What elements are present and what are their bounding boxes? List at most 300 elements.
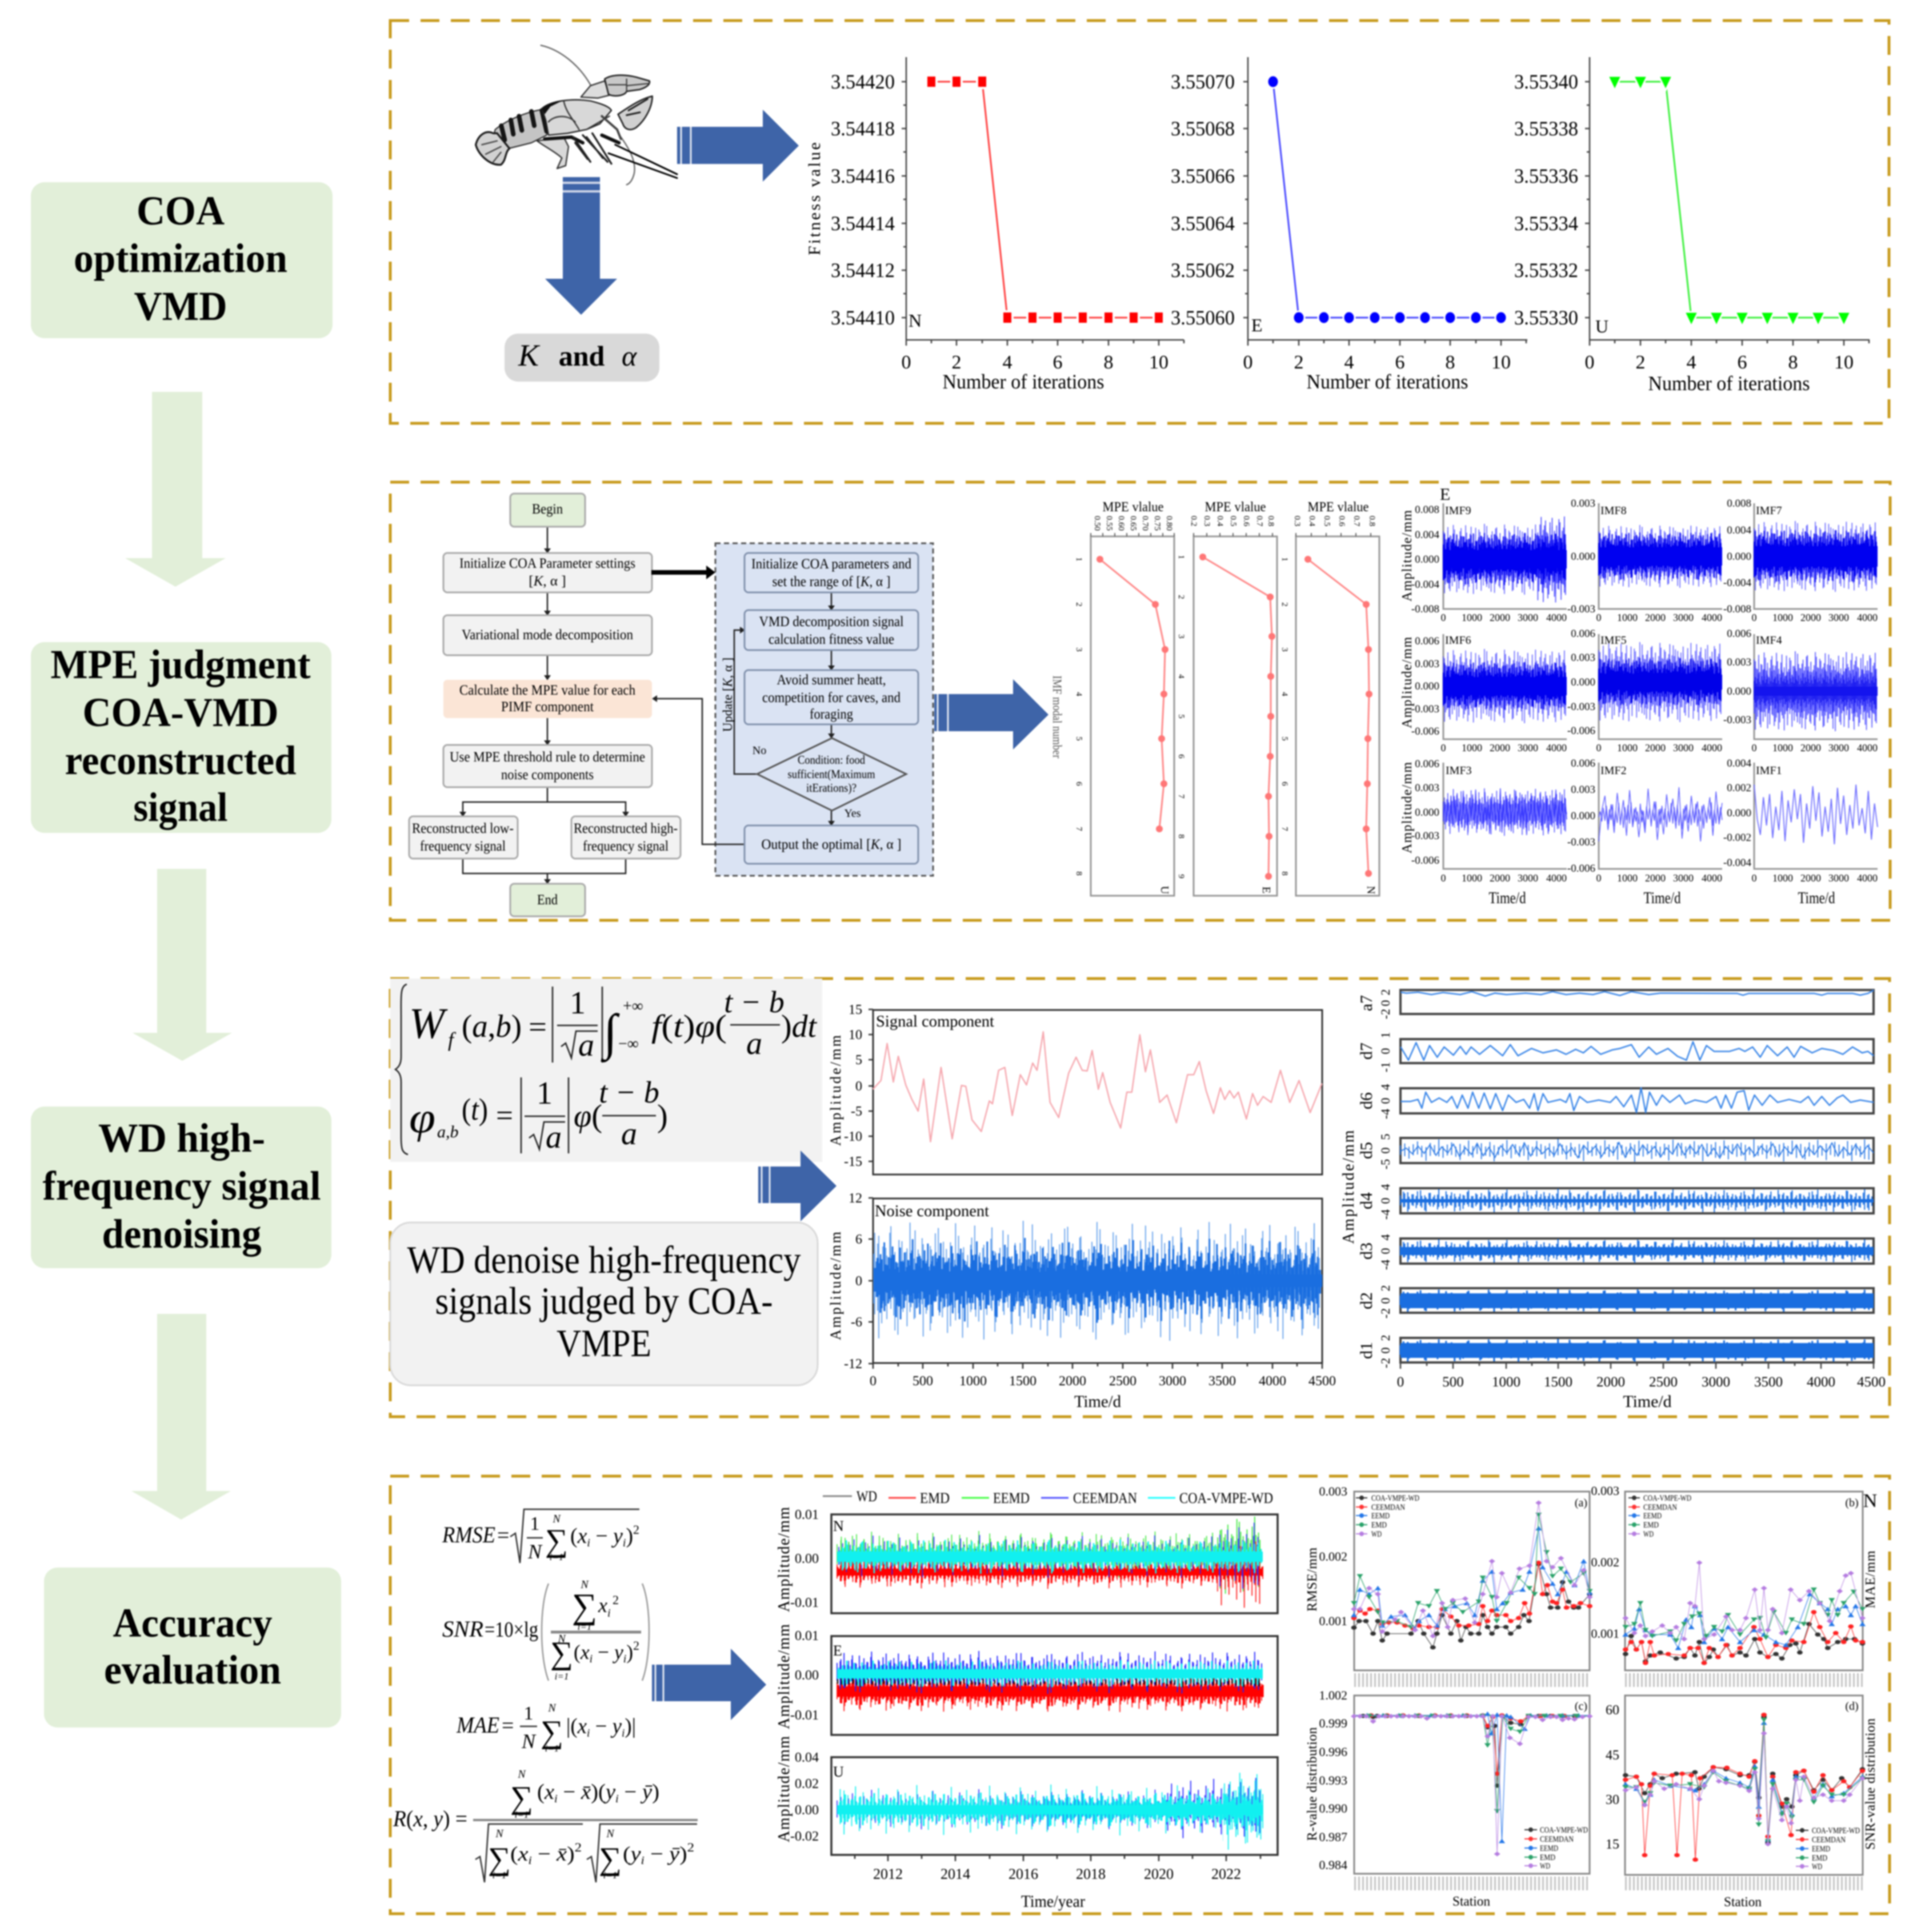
chart: noise component: 3000 xyxy=(1159,1374,1186,1389)
chart: N fitness curve: 2 xyxy=(952,352,961,373)
formula: R(x,y): − xyxy=(532,1842,557,1865)
strip y ticks: 2 xyxy=(1378,1285,1392,1291)
formula: R(x,y) xyxy=(393,1768,698,1882)
chart: MPE value N: 1 xyxy=(1280,557,1289,562)
strip y ticks: -4 xyxy=(1378,1260,1392,1270)
flow box: Initialize COA: Initialize COA Parameter settings xyxy=(459,556,635,571)
chart: (d) SNR-value: 60 xyxy=(1606,1703,1619,1718)
formula: R(x,y): − xyxy=(645,1842,669,1865)
tick labels: IMF x axes: 0 xyxy=(1596,742,1601,753)
legend (b): EEMD xyxy=(1643,1512,1662,1521)
axis titles: Time/d xyxy=(1489,889,1835,907)
tick labels: IMF x axes: 3000 xyxy=(1673,612,1694,623)
chart: N fitness curve: 0 xyxy=(902,352,911,373)
tick labels: IMF y axes: 0.008 xyxy=(1415,504,1439,516)
formula block: wavelet transform: t − b xyxy=(724,985,785,1019)
flow box: Begin: Begin xyxy=(532,502,563,517)
chart: U fitness curve: 3.55338 xyxy=(1514,117,1578,140)
chart grid: IMF components xyxy=(1400,485,1878,907)
strip labels: d4 xyxy=(1357,1192,1376,1209)
formula block: wavelet transform: a xyxy=(746,1026,762,1061)
chart: E fitness curve: 3.55068 xyxy=(1171,117,1235,140)
formula: SNR: i xyxy=(590,1653,593,1665)
chart: N fitness curve: 3.54414 xyxy=(831,212,895,235)
tick labels: IMF y axes: 0.000 xyxy=(1415,554,1439,566)
chart: N residual series: 0.01 xyxy=(795,1508,819,1522)
formula block: wavelet transform: W xyxy=(409,1000,449,1048)
label: E: E xyxy=(1440,485,1450,504)
chart: E fitness curve: 10 xyxy=(1491,352,1511,373)
formula: SNR: SNR xyxy=(442,1616,483,1642)
chart: MPE value U: MPE vlalue xyxy=(1103,500,1163,515)
tick labels: IMF y axes: 0.003 xyxy=(1727,656,1751,668)
chart: U fitness curve: 3.55334 xyxy=(1514,212,1578,235)
chart: (a) RMSE: 0.002 xyxy=(1319,1549,1347,1564)
formula: SNR: − xyxy=(593,1641,614,1664)
chart: (b) MAE: (b) xyxy=(1845,1497,1859,1509)
chart: signal component: 5 xyxy=(855,1053,862,1068)
chart: wavelet decomposition strips: 4500 xyxy=(1857,1374,1886,1390)
formula block: wavelet transform: )dt xyxy=(781,1009,817,1044)
chart: N fitness curve: 3.54418 xyxy=(831,117,895,140)
formula: R(x,y): R(x, y) = xyxy=(393,1806,467,1831)
formula: SNR: x xyxy=(598,1594,607,1617)
strip y ticks: 0 xyxy=(1378,1098,1392,1104)
flow box: Initialize COA parameters: Initialize COA parameters and xyxy=(751,556,911,572)
flow box: Output the optimal xyxy=(745,825,918,864)
chart: (b) MAE: MAE/mm xyxy=(1863,1550,1878,1609)
tick labels: IMF x axes xyxy=(1441,612,1878,884)
formula block: wavelet transform: = xyxy=(529,1011,547,1044)
legend (d) xyxy=(1796,1826,1860,1871)
tick labels: IMF x axes: 0 xyxy=(1752,872,1756,884)
formula: RMSE: N xyxy=(527,1540,543,1563)
arrow: initialize to COA loop xyxy=(651,566,715,579)
legend (d): EMD xyxy=(1812,1854,1827,1863)
chart: E fitness curve: 3.55062 xyxy=(1171,259,1235,282)
formula: R(x,y): ∑ xyxy=(488,1841,511,1877)
chart: E residual series: 0.01 xyxy=(795,1629,819,1644)
tick labels: IMF x axes: 4000 xyxy=(1546,872,1567,884)
text box: WD denoise description: VMPE xyxy=(557,1321,651,1365)
axis titles: Amplitude/mm: Amplitude/mm xyxy=(1400,637,1415,728)
chart: (c) R-value: 0.999 xyxy=(1319,1716,1347,1730)
tick labels: IMF y axes: -0.006 xyxy=(1411,855,1439,867)
formula: RMSE: = xyxy=(497,1524,509,1548)
chart: N fitness curve: 4 xyxy=(1002,352,1012,373)
chart: N residual series: -0.01 xyxy=(790,1596,819,1610)
formula: R(x,y): ∑ xyxy=(510,1780,533,1815)
axis titles: Amplitude/mm xyxy=(1400,510,1415,853)
tick labels: IMF x axes: 4000 xyxy=(1702,872,1722,884)
tick labels: IMF y axes xyxy=(1411,498,1752,875)
step box: COA optimization VMD: optimization xyxy=(74,235,287,281)
flow box: Calculate MPE xyxy=(443,680,652,718)
chart: E fitness curve: 8 xyxy=(1446,352,1455,373)
chart: (b) MAE: 0.002 xyxy=(1591,1555,1619,1569)
strip y ticks: -2 xyxy=(1378,1009,1392,1019)
text box: WD denoise description: signals judged by COA- xyxy=(435,1279,773,1322)
formula block: wavelet transform xyxy=(390,979,822,1162)
flow box: Reconstructed high-frequency signal: frequency signal xyxy=(583,839,669,854)
chart: MPE value U: 0.65 xyxy=(1128,516,1138,531)
chart: N fitness curve: 3.54410 xyxy=(831,306,895,329)
chart: (c) R-value: R-value distribution xyxy=(1305,1727,1320,1841)
chart: signal component xyxy=(827,1003,1322,1175)
chart: (d) SNR-value: 15 xyxy=(1606,1837,1619,1852)
tick labels: IMF y axes: 0.008 xyxy=(1727,498,1751,510)
chart: U residual series: 2012 xyxy=(873,1866,903,1882)
chart: noise component xyxy=(827,1191,1336,1411)
formula: SNR: N xyxy=(580,1578,589,1591)
chart: IMF4 xyxy=(1754,634,1878,731)
chart: (c) R-value: (c) xyxy=(1575,1700,1587,1713)
tick labels: IMF y axes: -0.006 xyxy=(1567,725,1595,737)
tick labels: IMF y axes: 0.006 xyxy=(1571,628,1595,640)
chart: signal component: -15 xyxy=(844,1155,862,1169)
strip labels: d2 xyxy=(1357,1292,1376,1309)
tick labels: IMF x axes: 4000 xyxy=(1702,612,1722,623)
tick labels: IMF x axes: 0 xyxy=(1752,742,1756,753)
chart: MPE value U: 3 xyxy=(1074,647,1083,652)
panel: accuracy evaluation xyxy=(390,1476,1890,1914)
formula: R(x,y): i=1 xyxy=(493,1870,506,1881)
tick labels: IMF y axes: -0.006 xyxy=(1567,863,1595,875)
flow box: VMD decomposition: calculation fitness value xyxy=(769,632,894,647)
chart: (d) SNR-value: 45 xyxy=(1606,1748,1619,1763)
tick labels: IMF y axes: -0.004 xyxy=(1723,857,1751,869)
axis title: IMF modal number: IMF modal number xyxy=(1050,675,1064,759)
tick labels: IMF x axes: 4000 xyxy=(1702,742,1722,753)
chart: U residual series: 0.02 xyxy=(795,1777,819,1791)
tick labels: IMF x axes: 1000 xyxy=(1462,612,1482,623)
chart: U residual series: 2014 xyxy=(941,1866,970,1882)
flow box: Begin xyxy=(510,494,585,527)
chart: MPE value E: 3 xyxy=(1176,634,1186,639)
legend (c): WD xyxy=(1540,1862,1550,1871)
step box: MPE judgment COA-VMD reconstructed signal: signal xyxy=(134,784,227,830)
chart: U fitness curve: 6 xyxy=(1737,352,1747,373)
tick labels: IMF y axes: 0.006 xyxy=(1571,757,1595,769)
tick labels: IMF x axes: 4000 xyxy=(1546,742,1567,753)
tick labels: IMF x axes: 3000 xyxy=(1828,742,1849,753)
strip y ticks: -5 xyxy=(1378,1159,1392,1169)
formula: SNR: ∑ xyxy=(572,1587,597,1626)
flow box: Reconstructed high-frequency signal xyxy=(571,816,681,859)
chart: E residual series xyxy=(775,1624,1278,1735)
formula: RMSE: 2 xyxy=(633,1522,639,1537)
chart: noise component: 500 xyxy=(913,1374,933,1389)
step box: MPE judgment COA-VMD reconstructed signal xyxy=(31,642,331,833)
legend: methods: EEMD xyxy=(993,1490,1030,1506)
legend (a): CEEMDAN xyxy=(1371,1503,1405,1512)
flow box: Avoid summer heat: competition for caves, and xyxy=(762,690,901,706)
legend: methods xyxy=(823,1488,1273,1506)
tick labels: IMF x axes: 0 xyxy=(1752,612,1756,623)
chart: MPE value N: 0.5 xyxy=(1322,516,1331,526)
arrow: formulas to residual charts xyxy=(652,1649,766,1720)
strip y ticks: 2 xyxy=(1378,1334,1392,1341)
formula: R(x,y): N xyxy=(517,1768,526,1781)
chart: E residual series: E xyxy=(833,1642,842,1659)
chart: MPE value E: 0.3 xyxy=(1202,516,1211,526)
chart: wavelet decomposition strips: 0 xyxy=(1397,1374,1404,1390)
chart: noise component: 4000 xyxy=(1259,1374,1286,1389)
chart: E fitness curve xyxy=(1171,57,1527,393)
formula block: wavelet transform: f(t)φ( xyxy=(651,1009,727,1044)
tick labels: IMF x axes: 2000 xyxy=(1645,872,1666,884)
chart: (a) RMSE: RMSE/mm xyxy=(1305,1548,1320,1612)
chart: (c) R-value: 0.993 xyxy=(1319,1773,1347,1787)
tick labels: IMF y axes: 0.003 xyxy=(1571,652,1595,664)
chart: U fitness curve xyxy=(1514,57,1870,395)
chart: MPE value E: 4 xyxy=(1176,674,1186,679)
formula block: wavelet transform: 1 xyxy=(570,985,586,1021)
flow box: Output the optimal: Output the optimal [K, α ] xyxy=(761,837,902,852)
axis title: Fitness value: Fitness value xyxy=(805,142,824,255)
text box: WD denoise description xyxy=(390,1222,818,1385)
formula block: wavelet transform: +∞ xyxy=(623,997,643,1015)
legend: methods: CEEMDAN xyxy=(1073,1490,1137,1506)
formula block: wavelet transform: (a,b) xyxy=(462,1009,522,1044)
strip y ticks: 1 xyxy=(1378,1032,1392,1039)
arrow: crayfish to convergence curves xyxy=(677,110,799,182)
formula: R(x,y): (y xyxy=(623,1842,640,1865)
chart: (d) SNR-value: Station xyxy=(1724,1895,1762,1910)
strip labels: d6 xyxy=(1357,1092,1376,1109)
chart: IMF1 xyxy=(1754,764,1878,844)
legend (c): COA-VMPE-WD xyxy=(1540,1826,1588,1835)
formula: R(x,y): (x xyxy=(537,1780,554,1804)
chart: noise component: 2500 xyxy=(1109,1374,1136,1389)
tick labels: IMF x axes: 0 xyxy=(1596,872,1601,884)
tick labels: IMF x axes: 3000 xyxy=(1828,612,1849,623)
tick labels: IMF x axes: 1000 xyxy=(1772,872,1793,884)
tick labels: IMF y axes: 0.000 xyxy=(1415,807,1439,819)
chart: IMF3: IMF3 xyxy=(1446,764,1472,777)
formula block: wavelet transform: (t) xyxy=(462,1092,488,1127)
tick labels: IMF y axes: 0.004 xyxy=(1415,529,1440,541)
chart: IMF6: IMF6 xyxy=(1445,634,1471,647)
arrow: to signal charts xyxy=(758,1151,837,1221)
chart: MPE value N: 8 xyxy=(1280,871,1289,876)
chart: MPE value N xyxy=(1280,500,1379,896)
chart: IMF3 xyxy=(1443,764,1567,836)
chart: (d) SNR-value: 30 xyxy=(1606,1793,1619,1807)
strip y ticks: -4 xyxy=(1378,1109,1392,1119)
flowchart: COA optimization loop xyxy=(651,543,933,876)
chart: MPE value U: 7 xyxy=(1074,827,1083,831)
tick labels: IMF x axes: 1000 xyxy=(1772,742,1793,753)
chart: U residual series xyxy=(775,1736,1278,1911)
strip labels: d5 xyxy=(1357,1142,1376,1159)
chart: (a) RMSE: (a) xyxy=(1575,1497,1587,1509)
chart: MPE value N: 0.8 xyxy=(1367,516,1376,526)
tick labels: IMF x axes: 1000 xyxy=(1617,612,1638,623)
tick labels: IMF y axes: -0.002 xyxy=(1723,832,1751,844)
strip d2 xyxy=(1400,1289,1874,1312)
strip y ticks xyxy=(1378,989,1392,1368)
step box: COA optimization VMD: VMD xyxy=(134,283,227,329)
flow box: VMD decomposition xyxy=(745,610,918,650)
tick labels: IMF x axes: 0 xyxy=(1441,872,1446,884)
formula: R(x,y): − xyxy=(558,1780,581,1804)
chart: signal component: 15 xyxy=(849,1003,862,1017)
flow box: Variational mode decomposition xyxy=(443,615,652,655)
chart: E fitness curve: 3.55070 xyxy=(1171,70,1235,93)
tick labels: IMF y axes: -0.003 xyxy=(1567,836,1595,848)
chart: MPE value N: 0.4 xyxy=(1307,516,1316,527)
formula: MAE: N xyxy=(521,1730,537,1753)
chart: signal component: Amplitude/mm xyxy=(827,1035,844,1146)
flow diamond: condition: itErations)? xyxy=(806,781,857,795)
formula: SNR: i xyxy=(623,1653,626,1665)
tick labels: IMF y axes: -0.003 xyxy=(1567,701,1595,713)
formula: MAE: y xyxy=(610,1714,622,1738)
formula: MAE: i xyxy=(587,1727,590,1739)
chart: N fitness curve: 10 xyxy=(1149,352,1168,373)
axis titles: Time/d: Time/d xyxy=(1798,889,1835,907)
chart: IMF7: IMF7 xyxy=(1756,504,1782,517)
chart: U residual series: -0.02 xyxy=(790,1829,819,1844)
box: K and alpha: K xyxy=(518,338,541,372)
tick labels: IMF y axes: 0.000 xyxy=(1571,551,1595,563)
tick labels: IMF y axes: 0.006 xyxy=(1415,635,1439,647)
flow box: Reconstructed high-frequency signal: Reconstructed high- xyxy=(574,821,678,836)
formula: SNR: ) xyxy=(626,1641,633,1664)
chart: (c) R-value: 0.990 xyxy=(1319,1801,1347,1815)
chart: E fitness curve: 2 xyxy=(1294,352,1304,373)
chart: wavelet decomposition strips: 4000 xyxy=(1807,1374,1835,1390)
chart: signal component: 0 xyxy=(855,1079,862,1094)
chart: MPE value E: 6 xyxy=(1176,754,1186,759)
chart: MPE value U: 0.50 xyxy=(1092,516,1102,531)
box: K and alpha: and xyxy=(559,340,605,372)
chart: MPE value U xyxy=(1074,500,1174,896)
legend (d): EEMD xyxy=(1812,1845,1830,1854)
chart: U fitness curve: 0 xyxy=(1585,352,1594,373)
chart: IMF9: IMF9 xyxy=(1445,504,1471,517)
legend (c): EMD xyxy=(1540,1853,1555,1862)
flow box: Reconstructed low-frequency signal xyxy=(409,816,518,859)
formula: RMSE: y xyxy=(611,1524,623,1548)
flow box: MPE threshold: Use MPE threshold rule to determine xyxy=(450,749,645,765)
chart: N fitness curve: 3.54412 xyxy=(831,259,895,282)
axis titles: Amplitude/mm: Amplitude/mm xyxy=(1400,762,1415,853)
chart: noise component: 1500 xyxy=(1009,1374,1036,1389)
flow box: Avoid summer heat xyxy=(745,670,918,724)
formula: R(x,y): ȳ) xyxy=(642,1780,659,1804)
strip y ticks: -2 xyxy=(1378,1308,1392,1318)
chart: noise component: 2000 xyxy=(1059,1374,1086,1389)
chart: (d) SNR-value: SNR-value distribution xyxy=(1863,1718,1878,1850)
chart: E residual series: Amplitude/mm xyxy=(775,1624,793,1729)
formula: MAE: = xyxy=(502,1714,514,1738)
chart: U fitness curve: 8 xyxy=(1788,352,1798,373)
legend: methods: COA-VMPE-WD xyxy=(1179,1490,1273,1506)
chart: wavelet decomposition strips: 3500 xyxy=(1754,1374,1783,1390)
legend (b): WD xyxy=(1643,1530,1654,1539)
tick labels: IMF y axes: 0.000 xyxy=(1727,686,1751,698)
formula: MAE: − xyxy=(590,1714,613,1738)
tick labels: IMF x axes: 2000 xyxy=(1800,742,1821,753)
flow box: VMD decomposition: VMD decomposition signal xyxy=(759,614,904,630)
legend (a) xyxy=(1356,1494,1419,1539)
strip d4 xyxy=(1400,1189,1874,1213)
flow box: Avoid summer heat: Avoid summer heatt, xyxy=(777,672,886,688)
formula: MAE: ∑ xyxy=(541,1714,563,1750)
flow box: Calculate MPE: Calculate the MPE value for each xyxy=(459,683,635,698)
chart: (c) R-value: Station xyxy=(1452,1894,1490,1909)
tick labels: IMF x axes: 2000 xyxy=(1490,612,1510,623)
chart: MPE value N: 6 xyxy=(1280,781,1289,786)
chart: wavelet decomposition strips: 2000 xyxy=(1596,1374,1625,1390)
tick labels: IMF x axes: 3000 xyxy=(1518,612,1538,623)
chart: wavelet decomposition strips: 1000 xyxy=(1492,1374,1520,1390)
chart: MPE value E: 8 xyxy=(1176,834,1186,839)
legend (b): EMD xyxy=(1643,1521,1659,1530)
legend (c): CEEMDAN xyxy=(1540,1835,1574,1844)
tick labels: IMF y axes: 0.003 xyxy=(1571,498,1595,510)
formula: R(x,y): i xyxy=(554,1793,558,1805)
chart: MPE value N: 7 xyxy=(1280,827,1289,831)
chart: (b) MAE: 0.001 xyxy=(1591,1626,1619,1641)
chart: wavelet decomposition strips: 1500 xyxy=(1544,1374,1572,1390)
legend (c): EEMD xyxy=(1540,1844,1558,1853)
chart: noise component: 0 xyxy=(855,1274,862,1289)
flow box: Variational mode decomposition: Variational mode decomposition xyxy=(462,627,633,643)
chart: U residual series: U xyxy=(833,1763,844,1780)
chart: E fitness curve: 3.55060 xyxy=(1171,306,1235,329)
flow box: Initialize COA: [K, α ] xyxy=(529,574,566,589)
chart: wavelet decomposition strips: 500 xyxy=(1442,1374,1464,1390)
chart: noise component: Time/d xyxy=(1074,1392,1121,1411)
chart: MPE value N: 4 xyxy=(1280,692,1289,696)
formula: R(x,y): i xyxy=(529,1854,532,1867)
axis titles: Time/d: Time/d xyxy=(1489,889,1526,907)
chart: (c) R-value: 0.987 xyxy=(1319,1830,1347,1844)
formula block: wavelet transform: a xyxy=(578,1028,594,1063)
panel: COA optimization results xyxy=(390,21,1889,423)
formula block: wavelet transform: a xyxy=(546,1120,562,1155)
chart: IMF4: IMF4 xyxy=(1756,634,1782,647)
flow box: Initialize COA parameters: set the range of [K, α ] xyxy=(773,574,890,590)
strip d7 xyxy=(1400,1042,1874,1060)
step box: WD high-frequency signal denoising: frequency signal xyxy=(42,1163,321,1209)
chart: MPE value N: 2 xyxy=(1280,602,1289,607)
chart: noise component: 1000 xyxy=(959,1374,987,1389)
tick labels: IMF y axes: 0.003 xyxy=(1571,784,1595,796)
chart: U fitness curve: 3.55332 xyxy=(1514,259,1578,282)
tick labels: IMF x axes: 1000 xyxy=(1462,872,1482,884)
step box: Accuracy evaluation xyxy=(44,1568,341,1727)
chart: MPE value N: 5 xyxy=(1280,736,1289,741)
chart: MPE value N: 3 xyxy=(1280,647,1289,652)
chart: MPE value E: 0.5 xyxy=(1228,516,1238,526)
legend (d): WD xyxy=(1812,1862,1822,1871)
strip a7 xyxy=(1400,990,1874,996)
chart: MPE value E: 0.4 xyxy=(1215,516,1224,527)
chart: MPE value U: 0.55 xyxy=(1104,516,1114,531)
formula: R(x,y): i xyxy=(641,1854,645,1867)
chart: MPE value N: 0.3 xyxy=(1292,516,1302,526)
tick labels: IMF x axes: 0 xyxy=(1441,612,1446,623)
strip labels: d7 xyxy=(1357,1043,1376,1060)
chart: MPE value N: N xyxy=(1364,886,1377,894)
formula block: wavelet transform: ) xyxy=(657,1099,668,1134)
box: K and alpha: α xyxy=(622,340,638,372)
tick labels: IMF y axes: 0.000 xyxy=(1727,807,1751,819)
